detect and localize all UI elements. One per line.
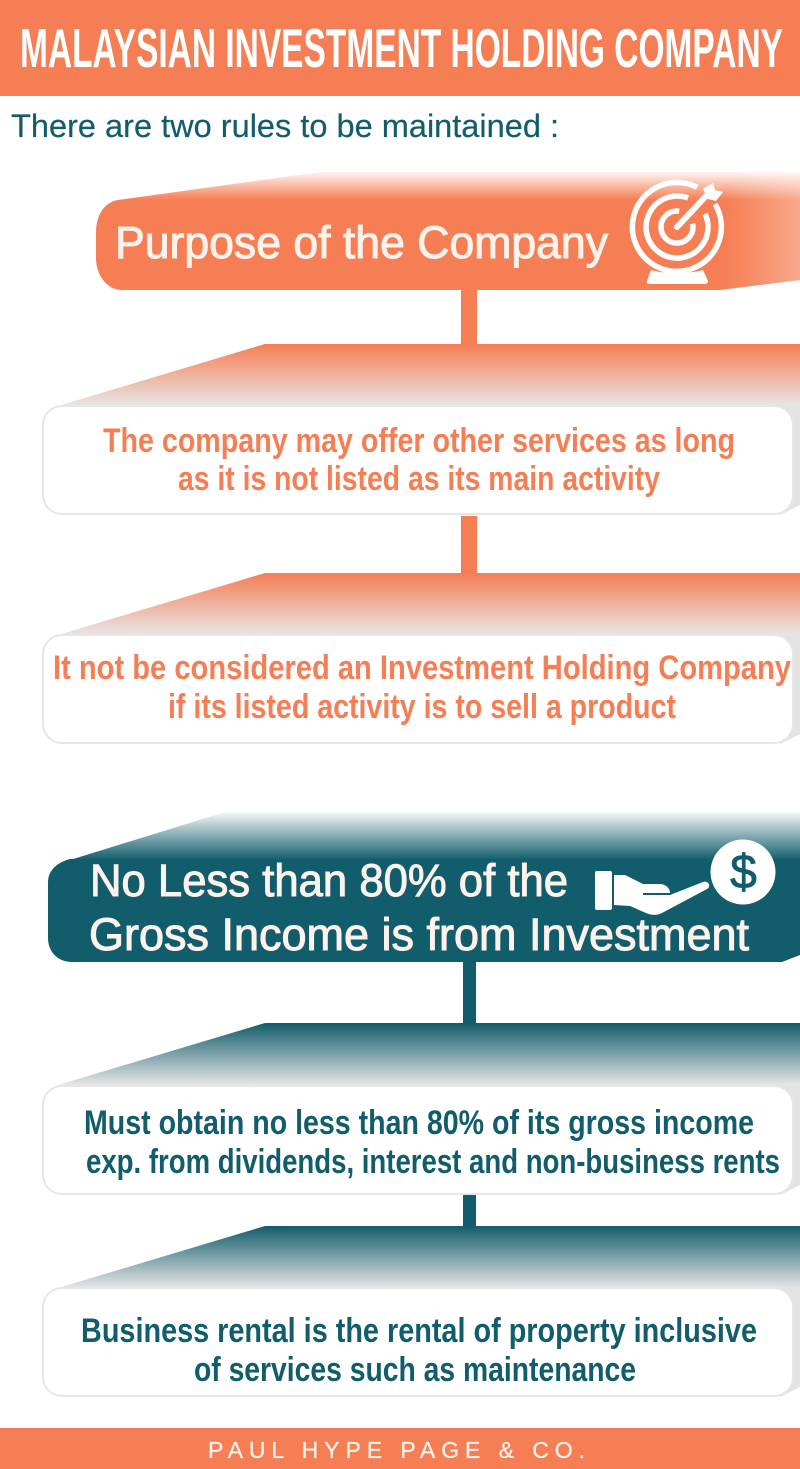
panel: rule 1 point 2 <box>43 573 800 744</box>
connector <box>461 290 477 344</box>
heading line 1: No Less than 80% of the <box>90 855 568 906</box>
connector <box>463 962 476 1023</box>
text: as it is not listed as its main activity <box>178 460 660 498</box>
footer text: PAUL HYPE PAGE & CO. <box>208 1437 585 1463</box>
panel: purpose of the company heading <box>96 172 800 290</box>
footer <box>0 1428 800 1469</box>
connector <box>461 516 477 573</box>
heading: purpose: Purpose of the Company <box>115 217 608 268</box>
intro text: There are two rules to be maintained : <box>11 108 559 144</box>
text: of services such as maintenance <box>194 1351 636 1389</box>
connector <box>463 1195 476 1226</box>
panel: rule 1 point 1 <box>43 344 800 515</box>
panel: gross income heading <box>48 812 800 962</box>
title banner <box>0 0 800 96</box>
heading line 2: Gross Income is from Investment <box>89 909 749 960</box>
text: if its listed activity is to sell a product <box>168 688 676 726</box>
icon: target with arrow <box>632 182 723 284</box>
panel: rule 2 point 1 <box>43 1023 800 1195</box>
panel: rule 2 point 2 <box>43 1226 800 1397</box>
icon: hand holding coin <box>595 840 776 915</box>
icon: hand holding coin: $ <box>730 846 757 899</box>
